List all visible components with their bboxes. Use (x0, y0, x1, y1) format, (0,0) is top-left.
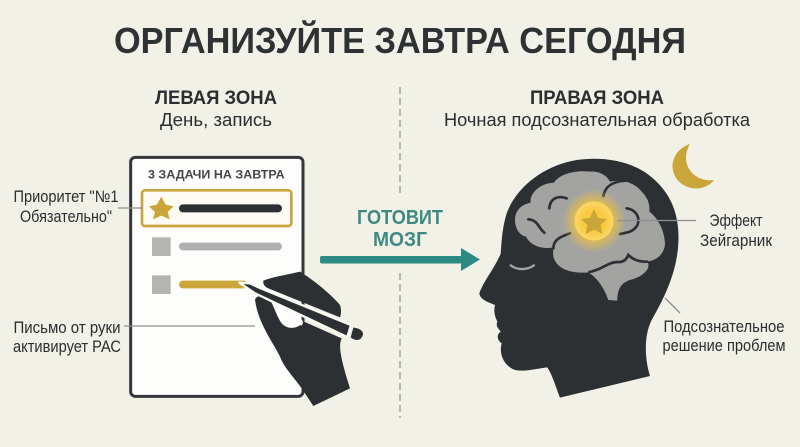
task row 2 (152, 237, 282, 256)
label: zeigarnik effect (700, 212, 773, 250)
task row 3 (152, 275, 247, 294)
arrow label: МОЗГ (373, 229, 427, 251)
arrow label: ГОТОВИТ (357, 207, 443, 229)
label: priority (14, 188, 118, 226)
label: priority: Приоритет "№1 (14, 188, 118, 206)
heading: right zone (444, 88, 751, 130)
label: subconscious problem solving: решение проблем (662, 337, 786, 355)
label: handwriting: Письмо от руки (14, 319, 120, 337)
leader: zeigarnik (618, 220, 696, 222)
divider: top (399, 87, 401, 197)
label: subconscious problem solving (662, 318, 786, 355)
label: zeigarnik effect: Зейгарник (700, 232, 773, 250)
brain (515, 171, 665, 301)
eye brow (511, 265, 534, 269)
arrow label (357, 207, 443, 251)
icon: head with brain (479, 159, 679, 398)
heading: right zone: ПРАВАЯ ЗОНА (530, 88, 664, 109)
icon: crescent moon (673, 144, 714, 188)
leader: subconscious (665, 298, 680, 313)
label: subconscious problem solving: Подсознательное (664, 318, 784, 336)
leader: handwriting (124, 325, 255, 327)
label: handwriting (13, 319, 121, 356)
label: priority: Обязательно" (20, 208, 112, 226)
title: ОРГАНИЗУЙТЕ ЗАВТРА СЕГОДНЯ (114, 19, 686, 61)
heading: left zone (155, 88, 277, 130)
heading: right zone: Ночная подсознательная обработка (444, 110, 751, 130)
leader: priority (118, 207, 143, 209)
brain folds (528, 181, 647, 272)
card heading: 3 ЗАДАЧИ НА ЗАВТРА (148, 169, 285, 182)
label: zeigarnik effect: Эффект (710, 212, 763, 230)
head silhouette (479, 159, 679, 398)
glow and star (562, 189, 626, 253)
divider: bottom (399, 273, 401, 418)
label: handwriting: активирует РАС (13, 338, 121, 356)
arrow: prepares brain (320, 248, 480, 271)
heading: left zone: ЛЕВАЯ ЗОНА (155, 88, 277, 109)
panel: task list card (131, 157, 303, 396)
priority task row (142, 190, 291, 226)
icon: hand with pen (239, 272, 363, 406)
heading: left zone: День, запись (160, 110, 272, 130)
